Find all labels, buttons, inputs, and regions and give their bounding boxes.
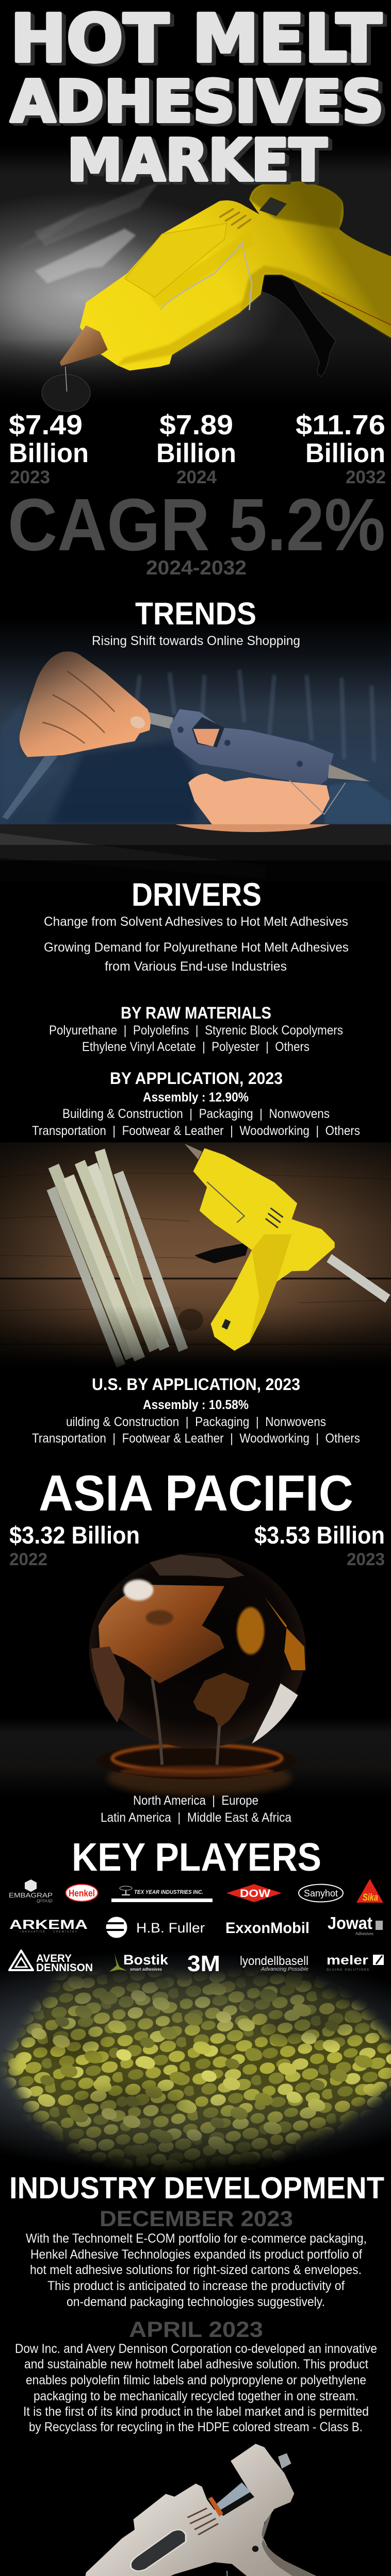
cloth folds (135, 670, 374, 762)
plank lines (0, 1173, 391, 1344)
gun shadow side (249, 1234, 292, 1342)
title text: ADHESIVES (10, 69, 384, 135)
sleeve right (324, 780, 391, 824)
gun body blue (170, 709, 334, 785)
golden patch (237, 1607, 264, 1654)
logo: Arkema: INNOVATIVE CHEMISTRY (20, 1930, 77, 1934)
regions list (101, 1793, 291, 1825)
raw materials list (49, 1023, 343, 1054)
gun body (85, 2444, 367, 2576)
december text: hot melt adhesive solutions for right-sized cartons & envelopes. (30, 2263, 362, 2277)
logo: 3M: 3M (187, 1951, 220, 1976)
bottom fade (0, 1306, 391, 1374)
CAGR period: 2024-2032 (146, 557, 247, 579)
market size 2032: Billion (305, 438, 385, 468)
logo: H.B. Fuller: H.B. Fuller (136, 1920, 205, 1936)
asia pacific heading: ASIA PACIFIC (39, 1465, 353, 1521)
gun panel (125, 224, 227, 297)
application list: Building & Construction | Packaging | Nonwovens (62, 1107, 330, 1121)
ground (0, 1718, 391, 1797)
red seam (322, 292, 391, 325)
back glue stick (3, 749, 57, 820)
US application list: uilding & Construction | Packaging | Nonwovens (66, 1415, 326, 1429)
by raw materials heading: BY RAW MATERIALS (121, 1004, 271, 1022)
logo: Dow (226, 1884, 282, 1902)
side window (131, 2530, 186, 2571)
dark wood strip with glue stick (0, 824, 391, 882)
december text: on-demand packaging technologies suggestively. (67, 2295, 325, 2309)
right land (264, 1597, 305, 1670)
feed stick in window (215, 2482, 251, 2510)
logo: Sika (356, 1879, 383, 1903)
logo: Bostik: smart adhesives (130, 1967, 162, 1972)
dark cloth shadow (50, 741, 200, 824)
glue puddle (42, 367, 90, 411)
application list (32, 1107, 360, 1138)
application list: Transportation | Footwear & Leather | Woodworking | Others (32, 1124, 360, 1138)
key players heading: KEY PLAYERS (72, 1835, 321, 1879)
april text: packaging to be mechanically recycled together in one stream. (34, 2389, 359, 2403)
logo: Jowat: Jowat (328, 1913, 372, 1933)
market size 2032: 2032 (346, 467, 386, 487)
logo: Embagrap: EMBAGRAP (9, 1891, 53, 1899)
regions list: North America | Europe (133, 1793, 258, 1808)
december text: Henkel Adhesive Technologies expanded its product portfolio of (30, 2247, 362, 2262)
logo: Sanyhot: Sanyhot (304, 1888, 338, 1899)
asia pacific 2022 value: $3.32 Billion (9, 1521, 140, 1549)
gun body (80, 181, 391, 370)
fade overlay (0, 147, 391, 412)
asia pacific 2022 value (9, 1521, 140, 1569)
pellets backdrop (0, 1947, 391, 2174)
trends heading: TRENDS (135, 596, 256, 631)
market size 2023 (9, 410, 89, 487)
gun wire (289, 780, 346, 815)
asia pacific 2023 value: 2023 (347, 1550, 385, 1569)
grip panel (262, 2513, 359, 2576)
logo: LyondellBasell: lyondellbasell (240, 1954, 308, 1968)
drivers text: Growing Demand for Polyurethane Hot Melt Adhesives (44, 940, 349, 955)
upper land (150, 1554, 245, 1578)
logo: ExxonMobil: ExxonMobil (225, 1920, 309, 1937)
yellow pellets (0, 1970, 391, 2173)
december heading: DECEMBER 2023 (100, 2207, 293, 2231)
puddle (97, 1742, 297, 1780)
vents (220, 209, 251, 228)
market size 2032: $11.76 (296, 410, 385, 440)
april text: by Recyclass for recycling in the HDPE colored stream - Class B. (29, 2420, 363, 2434)
dark interior patch (146, 1611, 173, 1625)
glue stick at hand (147, 712, 173, 729)
gun holes (177, 726, 303, 767)
wire stand (207, 1182, 245, 1223)
gun body (193, 1148, 335, 1351)
logo: LyondellBasell: Advancing Possible (260, 1967, 308, 1972)
april heading: APRIL 2023 (129, 2317, 263, 2342)
logo: Bostik (109, 1952, 169, 1972)
logo: Jowat: Adhesives (355, 1931, 373, 1936)
wood photo: glue sticks and yellow gun (0, 1142, 391, 1374)
title text: HOT MELT (10, 1, 382, 77)
lower-left continent (91, 1647, 125, 1723)
cloth backdrop (0, 617, 391, 824)
thumbnail (129, 714, 146, 731)
logo: Bostik: Bostik (123, 1952, 169, 1968)
logo: Embagrap (9, 1879, 53, 1904)
december text (26, 2231, 367, 2309)
april text: It is the first of its kind product in the label market and is permitted (23, 2404, 369, 2419)
trends text: Rising Shift towards Online Shopping (92, 634, 300, 648)
glue sticks (51, 1150, 183, 1366)
logo: Tex Year (111, 1886, 213, 1902)
spotlight backdrop (0, 147, 391, 412)
gun nozzle (328, 765, 370, 782)
assembly share: Assembly : 12.90% (143, 1090, 249, 1105)
hole (252, 2546, 258, 2552)
logo: Avery Dennison: DENNISON (36, 1962, 93, 1974)
logo: Avery Dennison: AVERY (36, 1953, 72, 1964)
logo: Tex Year: TEX YEAR INDUSTRIES INC. (134, 1889, 203, 1895)
market size 2024: Billion (156, 438, 236, 468)
right hand (188, 774, 330, 824)
market size 2032 (296, 410, 386, 487)
feed stick (329, 1258, 388, 1299)
heating element (193, 729, 219, 747)
by application heading: BY APPLICATION, 2023 (110, 1069, 283, 1088)
asia pacific 2022 value: 2022 (9, 1550, 47, 1569)
logo: Sanyhot (299, 1885, 343, 1902)
left hand (20, 652, 151, 757)
sleeve left (0, 701, 62, 824)
logo: Meler (327, 1953, 384, 1972)
gun shading (117, 181, 391, 365)
bright highlight (123, 1580, 153, 1601)
regions list: Latin America | Middle East & Africa (101, 1810, 291, 1825)
raw materials list: Polyurethane | Polyolefins | Styrenic Block Copolymers (49, 1023, 343, 1038)
market size 2023: Billion (9, 438, 89, 468)
market size 2024: $7.89 (159, 410, 233, 440)
raw materials list: Ethylene Vinyl Acetate | Polyester | Others (82, 1040, 309, 1054)
drivers heading: DRIVERS (132, 877, 262, 913)
wood knot (178, 1309, 203, 1331)
gun slot (192, 717, 224, 748)
faint glue sticks (15, 181, 159, 283)
market size 2023: 2023 (10, 467, 50, 487)
globe photo (0, 1553, 391, 1797)
glass streak (252, 1683, 298, 1744)
december text: This product is anticipated to increase the productivity of (47, 2279, 345, 2293)
gun nozzle (185, 1144, 202, 1160)
power cord (221, 2571, 227, 2576)
logo: Arkema (9, 1918, 88, 1934)
white glue gun photo (14, 2444, 367, 2576)
loading slot (259, 197, 287, 216)
south america (193, 1673, 249, 1728)
logo: Henkel: Henkel (69, 1888, 95, 1899)
drivers text: from Various End-use Industries (105, 959, 287, 974)
eurasia (99, 1585, 224, 1683)
side vignette (0, 1142, 391, 1374)
logo: H.B. Fuller (105, 1917, 205, 1938)
wire stand (161, 243, 252, 310)
US assembly share: Assembly : 10.58% (143, 1398, 249, 1412)
april text (15, 2342, 377, 2434)
gun trigger (194, 1242, 249, 1263)
april text: and sustainable new hotmelt label adhesive solution. This product (24, 2357, 368, 2371)
trends photo: hands holding blue glue gun (0, 617, 391, 824)
drivers text (44, 914, 349, 974)
logo: Sika: Sika (363, 1892, 378, 1903)
gun trigger (262, 274, 335, 377)
april text: enables polyolefin filmic labels and polypropylene or polyethylene (26, 2373, 366, 2387)
market size 2023: $7.49 (9, 410, 83, 440)
title text: MARKET (67, 127, 327, 194)
market size 2024 (156, 410, 236, 487)
title text (10, 1, 384, 194)
wood backdrop (0, 1142, 391, 1374)
logo: Henkel (66, 1885, 98, 1901)
ground glow (107, 1759, 292, 1797)
US by application heading: U.S. BY APPLICATION, 2023 (92, 1375, 300, 1394)
logo: Embagrap: group (37, 1898, 53, 1904)
drips (152, 1678, 219, 1765)
asia pacific 2023 value (254, 1521, 385, 1569)
december text: With the Technomelt E-COM portfolio for e-commerce packaging, (26, 2231, 367, 2246)
logo: Meler: meler (327, 1953, 368, 1968)
drivers text: Change from Solvent Adhesives to Hot Melt Adhesives (44, 914, 348, 929)
stick window (215, 2482, 254, 2516)
logo: Avery Dennison (9, 1951, 93, 1974)
US application list (32, 1415, 360, 1446)
gun vents (266, 1208, 283, 1228)
logo: Arkema: ARKEMA (9, 1918, 88, 1932)
orange collar (208, 2497, 223, 2517)
logo: Meler: GLUING SOLUTIONS (327, 1969, 369, 1972)
market size 2024: 2024 (176, 467, 217, 487)
feed stick (278, 2453, 291, 2469)
vents (188, 2508, 218, 2535)
switch (222, 1319, 231, 1330)
US application list: Transportation | Footwear & Leather | Woodworking | Others (32, 1431, 360, 1446)
sphere (89, 1553, 306, 1748)
hero image: yellow glue gun (0, 147, 391, 412)
nozzle (60, 326, 108, 366)
logo: Dow: DOW (240, 1888, 270, 1900)
finger creases (42, 671, 115, 743)
